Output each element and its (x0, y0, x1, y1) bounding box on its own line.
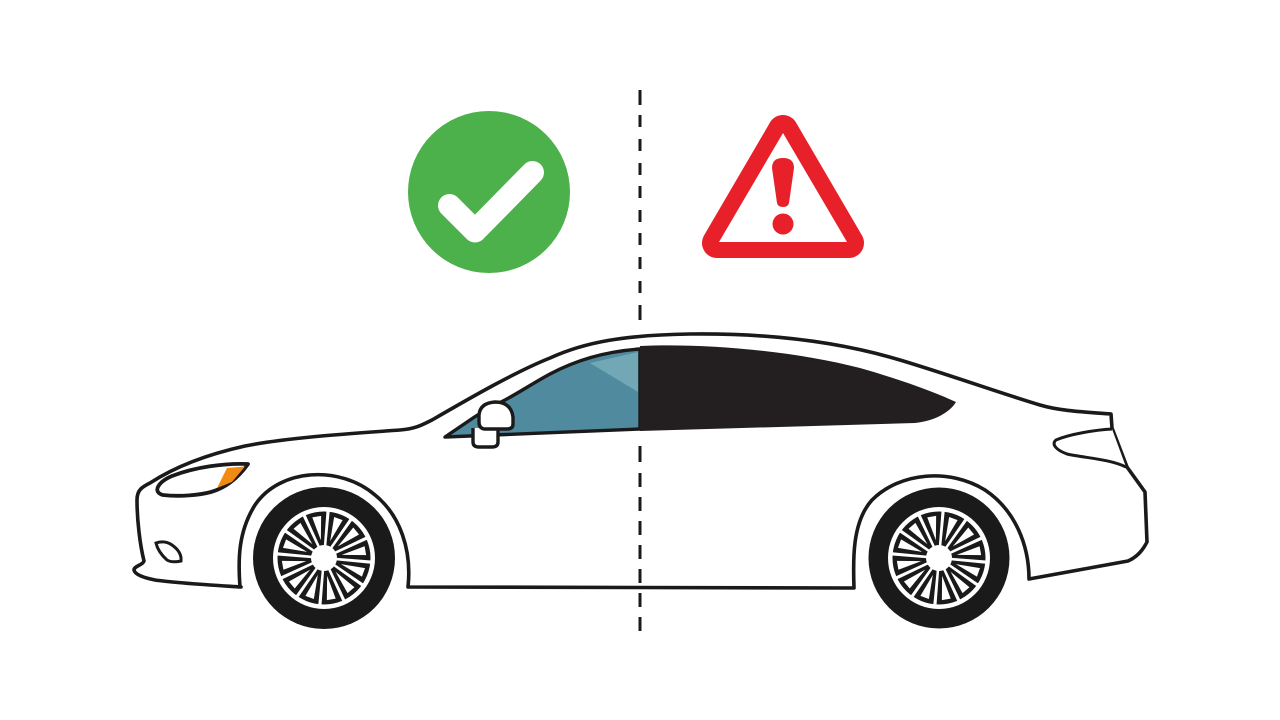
window glare (590, 352, 638, 392)
headlight (157, 464, 248, 496)
icon: red warning triangle (717, 130, 849, 243)
clear front window (445, 349, 640, 437)
car illustration (134, 334, 1147, 629)
front wheel (253, 487, 395, 629)
side mirror (473, 402, 513, 447)
tail light (1054, 429, 1126, 467)
dashed center divider (638, 90, 642, 631)
fog light (156, 542, 181, 562)
car body outline (134, 334, 1147, 588)
tinted rear window (640, 345, 956, 431)
rear wheel (868, 488, 1010, 628)
icon: green check mark (408, 111, 570, 273)
